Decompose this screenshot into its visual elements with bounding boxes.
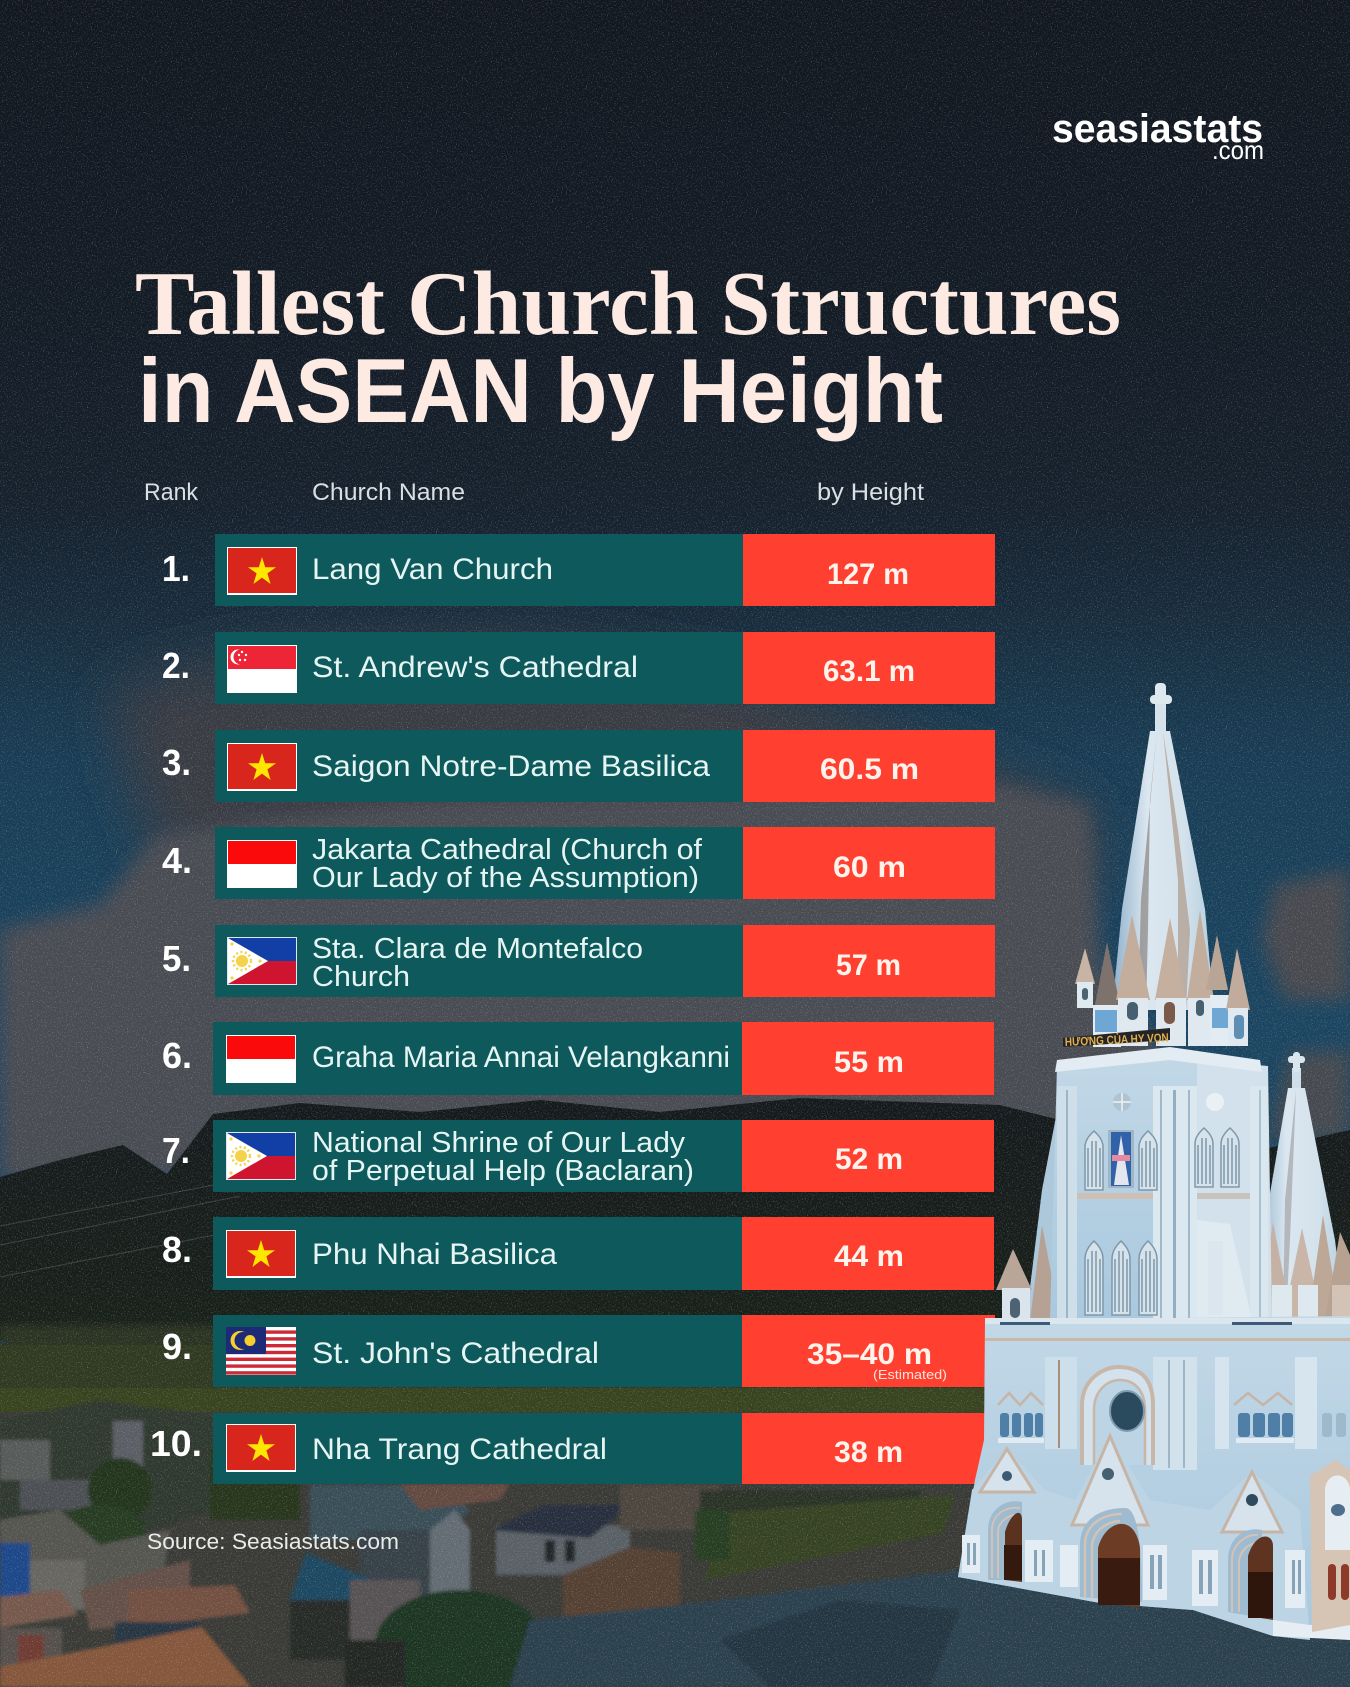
row 5: Sta. Clara de Montefalco Church 57 m (162, 925, 995, 997)
row 4: Jakarta Cathedral 60 m: Jakarta Cathedral (Church of (312, 834, 703, 866)
row 8: Phu Nhai Basilica 44 m: 44 m (834, 1240, 904, 1273)
row 9: St. John's Cathedral 35–40 m (Estimated): 35–40 m (807, 1338, 932, 1371)
row 8: Phu Nhai Basilica 44 m: 8. (162, 1229, 192, 1270)
row 3: Saigon Notre-Dame Basilica 60.5 m: Saigon Notre-Dame Basilica (312, 750, 710, 783)
row 7: National Shrine (Baclaran) 52 m: 7. (162, 1130, 190, 1171)
row 10: Nha Trang Cathedral 38 m: 38 m (834, 1436, 903, 1469)
row 2: St. Andrew's Cathedral 63.1 m (162, 632, 995, 704)
title (135, 253, 1121, 442)
table header: Rank (144, 479, 199, 506)
lower-left pinnacles (996, 1225, 1060, 1320)
row 9: St. John's Cathedral 35–40 m (Estimated): St. John's Cathedral (312, 1337, 599, 1370)
row 1: Lang Van Church 127 m (162, 534, 995, 606)
title: in ASEAN by Height (138, 341, 943, 442)
row 5: Sta. Clara de Montefalco Church 57 m: 5. (162, 938, 191, 979)
row 10: Nha Trang Cathedral 38 m: 10. (150, 1423, 202, 1464)
beige side section (1310, 1460, 1350, 1632)
row 8: Phu Nhai Basilica 44 m: Phu Nhai Basilica (312, 1238, 557, 1271)
row 7: National Shrine (Baclaran) 52 m (162, 1120, 994, 1192)
row 6: Graha Maria Annai Velangkanni 55 m: 6. (162, 1035, 192, 1076)
row 2: St. Andrew's Cathedral 63.1 m: 63.1 m (823, 655, 915, 688)
table header: by Height (817, 479, 924, 506)
rose window (1082, 1367, 1153, 1465)
row 7: National Shrine (Baclaran) 52 m: National Shrine of Our Lady (312, 1127, 686, 1159)
table header: Church Name (312, 479, 465, 506)
row 4: Jakarta Cathedral 60 m: 4. (162, 840, 192, 881)
row 7: National Shrine (Baclaran) 52 m: of Perpetual Help (Baclaran) (312, 1155, 694, 1187)
row 4: Jakarta Cathedral 60 m: Our Lady of the Assumption) (312, 862, 699, 894)
church illustration (958, 683, 1350, 1640)
table header (144, 479, 924, 506)
row 6: Graha Maria Annai Velangkanni 55 m: Graha Maria Annai Velangkanni (312, 1041, 730, 1074)
row 8: Phu Nhai Basilica 44 m (162, 1217, 994, 1290)
row 6: Graha Maria Annai Velangkanni 55 m (162, 1022, 994, 1095)
row 1: Lang Van Church 127 m: 127 m (827, 558, 909, 591)
row 3: Saigon Notre-Dame Basilica 60.5 m (162, 730, 995, 802)
logo: seasiastats.com: seasiastats (1052, 107, 1263, 151)
row 2: St. Andrew's Cathedral 63.1 m: 2. (162, 645, 190, 686)
secondary right spire (1255, 1052, 1350, 1320)
main spire (1112, 683, 1214, 1010)
row 1: Lang Van Church 127 m: Lang Van Church (312, 553, 553, 586)
row 2: St. Andrew's Cathedral 63.1 m: St. Andrew's Cathedral (312, 651, 638, 684)
row 5: Sta. Clara de Montefalco Church 57 m: Church (312, 961, 410, 993)
spire cluster of pinnacles (1075, 910, 1250, 1047)
row 4: Jakarta Cathedral 60 m: 60 m (833, 851, 906, 884)
row 7: National Shrine (Baclaran) 52 m: 52 m (835, 1143, 903, 1176)
title: Tallest Church Structures (135, 253, 1121, 354)
row 10: Nha Trang Cathedral 38 m: Nha Trang Cathedral (312, 1433, 607, 1466)
row 9: St. John's Cathedral 35–40 m (Estimated): (Estimated) (873, 1367, 947, 1382)
row 3: Saigon Notre-Dame Basilica 60.5 m: 60.5 m (820, 753, 919, 786)
row 5: Sta. Clara de Montefalco Church 57 m: 57 m (836, 949, 901, 982)
logo: seasiastats.com: .com (1212, 135, 1264, 165)
lower church body (958, 1316, 1350, 1636)
row 9: St. John's Cathedral 35–40 m (Estimated): 9. (162, 1326, 192, 1367)
row 10: Nha Trang Cathedral 38 m (150, 1413, 995, 1484)
row 3: Saigon Notre-Dame Basilica 60.5 m: 3. (162, 742, 191, 783)
row 4: Jakarta Cathedral 60 m (162, 827, 995, 899)
banner: HƯƠNG CỦA HY VỌNG: HƯƠNG CỦA HY VỌN (1064, 1029, 1169, 1049)
main tower (1050, 1047, 1272, 1322)
row 6: Graha Maria Annai Velangkanni 55 m: 55 m (834, 1046, 904, 1079)
left flank of main tower (1026, 1085, 1072, 1320)
source note: Source: Seasiastats.com (147, 1529, 399, 1554)
row 1: Lang Van Church 127 m: 1. (162, 548, 190, 589)
row 9: St. John's Cathedral 35–40 m (Estimated) (162, 1315, 995, 1387)
row 5: Sta. Clara de Montefalco Church 57 m: Sta. Clara de Montefalco (312, 933, 643, 965)
porches, gables and doors (958, 1436, 1350, 1640)
